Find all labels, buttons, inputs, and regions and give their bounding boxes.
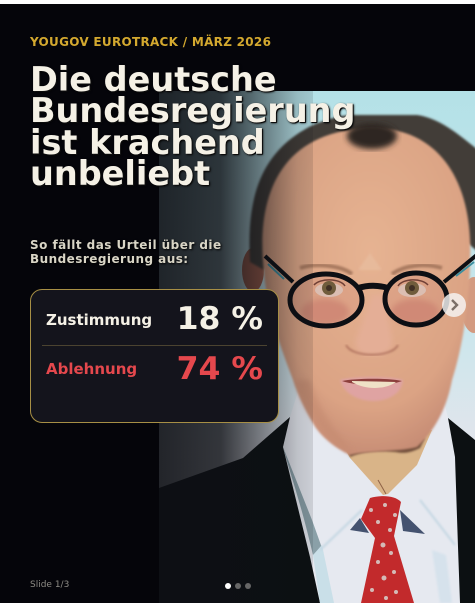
title: Bundesregierung [30,91,356,130]
icon: suit [159,417,475,603]
icon: ear [242,248,475,333]
left fade overlay [159,91,313,603]
title [30,60,356,193]
icon: face [262,123,470,455]
icon: mouth [340,377,403,401]
eyebrow: YOUGOV EUROTRACK / MÄRZ 2026 [30,35,271,49]
title: unbeliebt [30,154,210,193]
panel: results card [30,289,279,423]
subtitle [30,238,222,266]
icon: hair [249,115,475,270]
icon: next arrow [442,293,466,317]
label: Zustimmung: Zustimmung [46,311,152,329]
value: 74 %: 74 % [177,351,263,387]
title: Die deutsche [30,60,277,99]
icon: eyes [314,280,428,297]
icon: shirt [283,385,460,603]
portrait photo [159,91,475,603]
pagination dots [225,583,251,589]
subtitle: Bundesregierung aus: [30,252,189,266]
slide counter: Slide 1/3 [30,580,69,590]
value: 18 %: 18 % [177,301,263,337]
icon: neck [340,430,432,495]
icon: tie [350,496,425,603]
icon: glasses [265,254,475,326]
subtitle: So fällt das Urteil über die [30,238,222,252]
title: ist krachend [30,123,265,162]
label: Ablehnung: Ablehnung [46,360,137,378]
